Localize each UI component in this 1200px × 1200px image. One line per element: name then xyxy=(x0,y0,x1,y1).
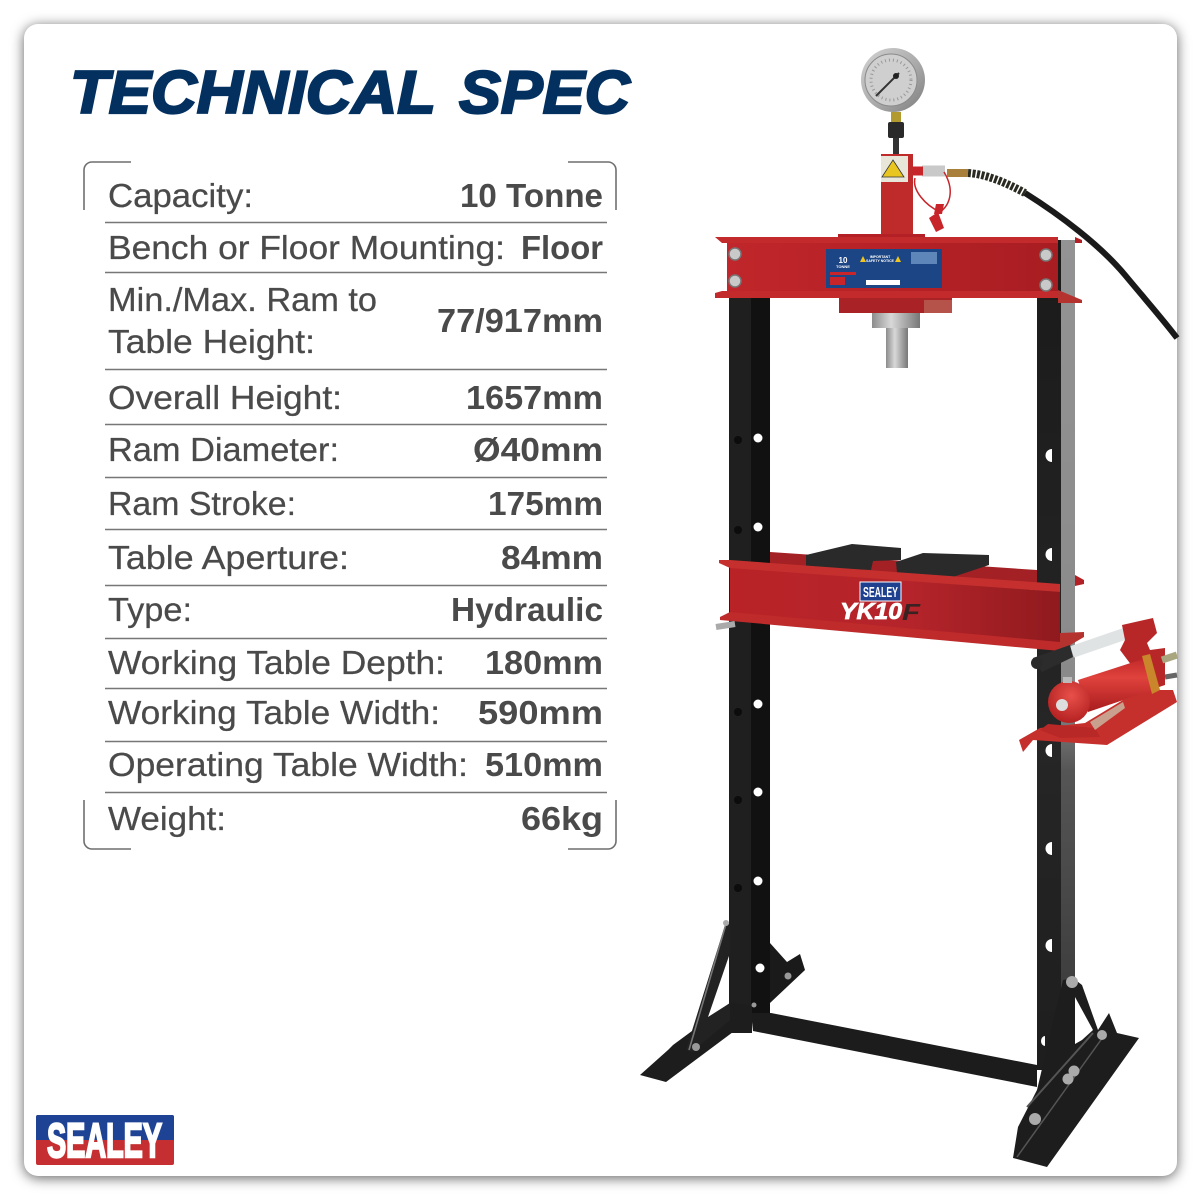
row: ram diameter: Ram Diameter: xyxy=(108,431,339,468)
row: type: Type: xyxy=(108,591,192,628)
logo: SEALEY: SEALEY xyxy=(47,1115,162,1168)
row: working table width: 590mm xyxy=(478,694,603,731)
row: capacity xyxy=(108,177,603,214)
row: weight: Weight: xyxy=(108,800,226,837)
left foot xyxy=(640,920,805,1082)
safety label: 10 xyxy=(839,256,848,265)
pump cylinder xyxy=(1078,659,1153,712)
row: working table depth: 180mm xyxy=(485,644,603,681)
pump handle xyxy=(1072,631,1133,652)
badge: SEALEY: SEALEY xyxy=(863,584,898,601)
pump plate xyxy=(1019,690,1177,752)
row: ram stroke: Ram Stroke: xyxy=(108,485,296,522)
row: operating table width: Operating Table Width: xyxy=(108,746,468,783)
row: mounting: Bench or Floor Mounting: xyxy=(108,229,505,266)
title: TECHNICAL xyxy=(70,59,436,126)
illustration: hydraulic press xyxy=(640,48,1177,1167)
row: working table depth xyxy=(108,644,603,681)
row divider lines xyxy=(105,222,607,792)
model name: YK10 xyxy=(840,598,902,624)
row: ram to table height: 77/917mm xyxy=(437,302,603,339)
row: working table width xyxy=(108,694,603,731)
row: weight xyxy=(108,800,603,837)
row: weight: 66kg xyxy=(521,800,603,837)
title: SPEC xyxy=(459,59,632,126)
row: ram stroke: 175mm xyxy=(488,485,603,522)
locking pin xyxy=(716,624,735,627)
bolts xyxy=(729,248,1052,291)
hand pump xyxy=(1019,618,1177,752)
row: overall height: 1657mm xyxy=(466,379,603,416)
row: ram to table height: Table Height: xyxy=(108,323,315,360)
pump head xyxy=(1120,618,1165,690)
row: ram diameter: Ø40mm xyxy=(473,431,603,468)
hose xyxy=(912,171,1177,338)
model name xyxy=(840,598,921,625)
logo: SEALEY xyxy=(36,1115,174,1168)
title xyxy=(70,59,632,126)
badge: SEALEY xyxy=(860,582,901,601)
safety label: SAFETY NOTICE xyxy=(866,259,895,263)
row: ram stroke xyxy=(108,485,603,522)
safety label: TONNE xyxy=(836,264,850,269)
row: overall height: Overall Height: xyxy=(108,379,342,416)
row: type: Hydraulic xyxy=(451,591,603,628)
rear base bar xyxy=(751,1013,1037,1087)
row: ram diameter xyxy=(108,431,603,468)
right column xyxy=(1037,240,1075,1070)
row: table aperture xyxy=(108,539,603,576)
spec table xyxy=(84,162,616,849)
row: mounting: Floor xyxy=(521,229,603,266)
left column xyxy=(729,296,770,1033)
safety label xyxy=(826,249,942,288)
row: operating table width xyxy=(108,746,603,783)
ram cylinder xyxy=(838,154,925,239)
model name: F xyxy=(902,599,921,625)
row: table aperture: 84mm xyxy=(501,539,603,576)
pressure gauge xyxy=(861,48,925,154)
row: capacity: Capacity: xyxy=(108,177,253,214)
row: ram to table height xyxy=(108,281,603,360)
row: overall height xyxy=(108,379,603,416)
red safety cap xyxy=(915,172,950,232)
row: type xyxy=(108,591,603,628)
row: operating table width: 510mm xyxy=(485,746,603,783)
row: ram to table height: Min./Max. Ram to xyxy=(108,281,377,318)
row: working table depth: Working Table Depth: xyxy=(108,644,445,681)
safety label: IMPORTANT xyxy=(870,255,891,259)
row: working table width: Working Table Width: xyxy=(108,694,440,731)
top beam xyxy=(715,237,1082,368)
row: table aperture: Table Aperture: xyxy=(108,539,349,576)
row: capacity: 10 Tonne xyxy=(460,177,603,214)
middle table beam xyxy=(719,544,1084,651)
right foot xyxy=(1013,976,1139,1167)
corner brackets xyxy=(84,162,616,849)
